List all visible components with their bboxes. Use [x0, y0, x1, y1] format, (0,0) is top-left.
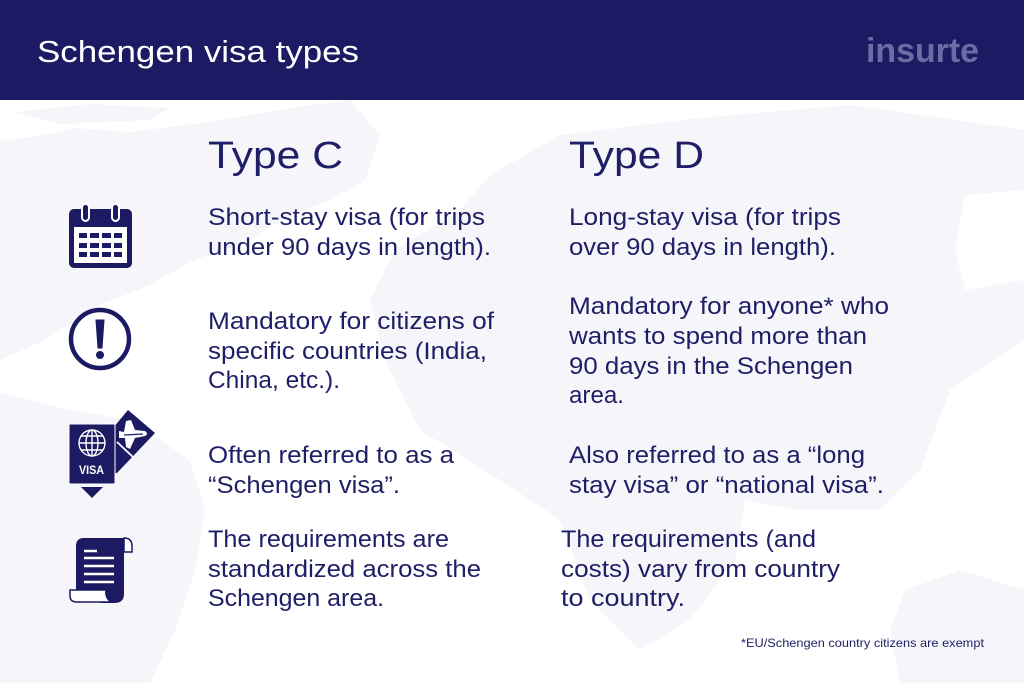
Type C: requirements: standardized across the: [208, 556, 481, 583]
Type C: visa length: under 90 days in length).: [208, 234, 491, 261]
Type D: visa length: Long-stay visa (for trips: [569, 204, 841, 231]
Type C: requirements: The requirements are: [208, 526, 449, 553]
Type D text blocks: [561, 204, 889, 612]
Type C: who needs it: specific countries (India,: [208, 338, 487, 365]
Type C: also known as: [208, 442, 455, 499]
icon: visa passport and ticket: [69, 410, 155, 498]
Type C: who needs it: [208, 308, 494, 394]
Type D: visa length: over 90 days in length).: [569, 234, 836, 261]
Type D: requirements: [561, 526, 840, 612]
Type C: requirements: [208, 526, 481, 612]
Type D: requirements: The requirements (and: [561, 526, 816, 553]
icon: exclamation mark: [71, 310, 129, 368]
header bar: [0, 0, 1024, 100]
Type D: visa length: [569, 204, 841, 261]
Type D: who needs it: area.: [569, 382, 624, 409]
Type D: requirements: costs) vary from country: [561, 556, 840, 583]
Type C: visa length: Short-stay visa (for trips: [208, 204, 485, 231]
Type C: who needs it: China, etc.).: [208, 367, 340, 394]
Type D: requirements: to country.: [561, 585, 685, 612]
column heading: Type C: Type C: [208, 135, 343, 177]
Type D: who needs it: wants to spend more than: [568, 323, 867, 350]
footnote: *EU/Schengen country citizens are exempt: [741, 636, 985, 650]
Type C text blocks: [208, 204, 494, 612]
Type C: who needs it: Mandatory for citizens of: [208, 308, 494, 335]
Type D: who needs it: 90 days in the Schengen: [569, 353, 853, 380]
Type C: also known as: “Schengen visa”.: [208, 472, 400, 499]
icon: calendar: [69, 204, 132, 268]
title: Schengen visa types: [37, 34, 359, 69]
logo: insurte: insurte: [866, 32, 979, 70]
icon: scroll document: [70, 538, 132, 603]
Type C: also known as: Often referred to as a: [208, 442, 455, 469]
Type D: also known as: stay visa” or “national visa”.: [569, 472, 884, 499]
Type C: requirements: Schengen area.: [208, 585, 384, 612]
Type D: also known as: Also referred to as a “long: [569, 442, 865, 469]
Type C: visa length: [208, 204, 491, 261]
Type D: who needs it: [568, 293, 889, 409]
Type D: also known as: [569, 442, 884, 499]
icon: visa passport and ticket: VISA: [79, 463, 104, 477]
column heading: Type D: Type D: [569, 135, 704, 177]
Type D: who needs it: Mandatory for anyone* who: [569, 293, 889, 320]
